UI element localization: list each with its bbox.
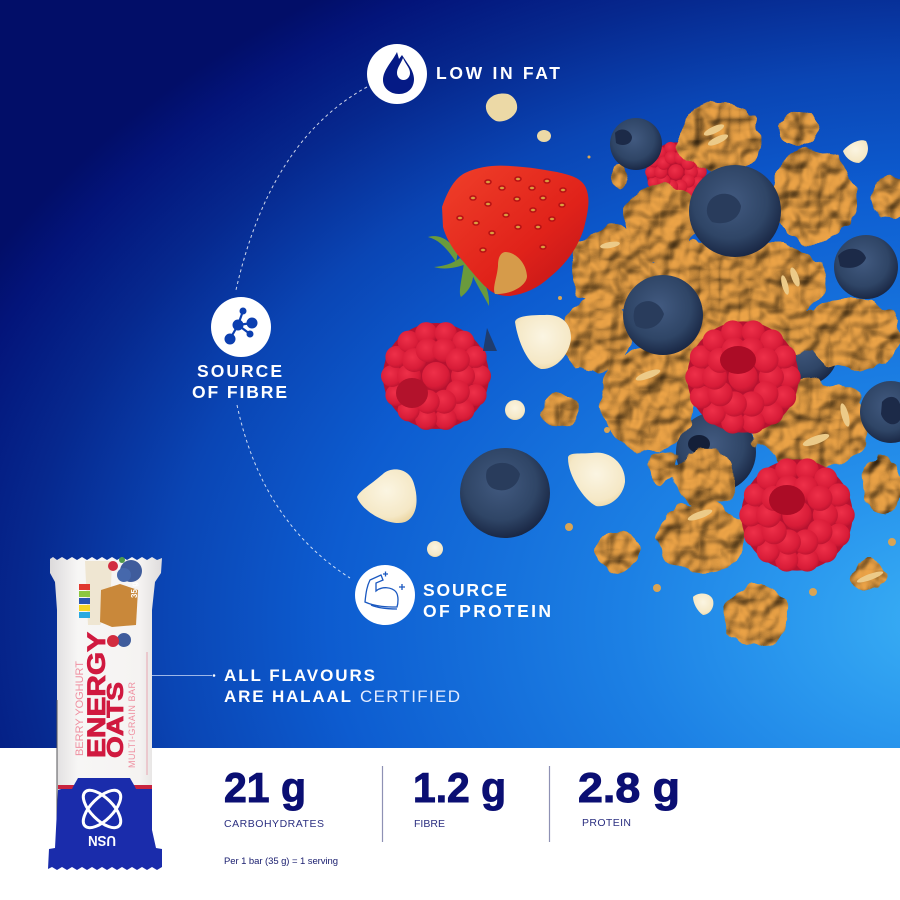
wrapper product name	[74, 632, 137, 768]
USN logo	[77, 784, 127, 834]
product: energy oats bar wrapper: USN	[88, 832, 116, 849]
raspberries	[381, 320, 855, 572]
oat flakes	[600, 122, 884, 585]
halaal callout: ARE HALAAL	[224, 687, 351, 706]
benefit: low in fat	[367, 44, 560, 104]
granola over blueberry	[497, 254, 734, 506]
icon: molecule	[225, 308, 257, 344]
stat: protein: PROTEIN	[582, 817, 631, 829]
benefit: source of protein: OF PROTEIN	[423, 601, 551, 621]
wrapper product name: OATS	[102, 682, 128, 758]
icon: flexed arm	[365, 572, 405, 609]
strawberry	[428, 166, 588, 306]
strawberry seeds	[457, 177, 566, 252]
benefit: source of fibre	[192, 297, 287, 402]
white nutrition strip	[0, 748, 900, 900]
halaal callout	[150, 666, 460, 706]
granola piece on strawberry	[494, 252, 527, 294]
stat: fibre: 1.2 g	[413, 764, 506, 811]
halaal callout: ALL FLAVOURS	[224, 666, 375, 685]
wrapper product name: BERRY YOGHURT	[74, 661, 86, 756]
product: energy oats bar wrapper	[48, 557, 162, 870]
stat: protein: 2.8 g	[578, 764, 680, 811]
benefit: source of fibre: SOURCE	[197, 361, 282, 381]
wrapper top artwork	[79, 557, 142, 647]
blueberries	[460, 118, 900, 538]
benefit: low in fat: LOW IN FAT	[436, 63, 560, 83]
wrapper body	[50, 557, 162, 848]
benefit: source of fibre: OF FIBRE	[192, 382, 287, 402]
wrapper product name: ENERGY	[83, 632, 111, 758]
halaal callout: CERTIFIED	[360, 687, 460, 706]
crumbs	[558, 156, 896, 596]
stat: fibre: FIBRE	[414, 818, 445, 830]
back blueberries	[676, 319, 838, 492]
wrapper side panel lines	[146, 652, 148, 775]
nutrition stats	[224, 764, 680, 867]
stat: fibre	[413, 764, 506, 830]
dashed arc connecting benefits	[236, 87, 367, 578]
back raspberry	[645, 142, 707, 202]
serving note: Per 1 bar (35 g) = 1 serving	[224, 856, 338, 867]
wrapper blue base	[48, 778, 162, 870]
white yoghurt chips	[357, 93, 868, 615]
wrapper top artwork: 35 g	[130, 582, 139, 598]
stat: carbohydrates: 21 g	[224, 764, 306, 811]
strawberry leaves	[428, 236, 489, 306]
benefit: source of protein: SOURCE	[423, 580, 507, 600]
granola clusters	[541, 104, 900, 647]
food illustration	[357, 93, 900, 647]
wrapper product name: MULTI-GRAIN BAR	[127, 682, 137, 768]
stat: carbohydrates	[224, 764, 324, 830]
blueberry shard	[483, 328, 497, 351]
stat: carbohydrates: CARBOHYDRATES	[224, 818, 324, 830]
icon: fat drops	[383, 52, 414, 94]
stat: protein	[578, 764, 680, 829]
benefit: source of protein	[355, 565, 551, 625]
